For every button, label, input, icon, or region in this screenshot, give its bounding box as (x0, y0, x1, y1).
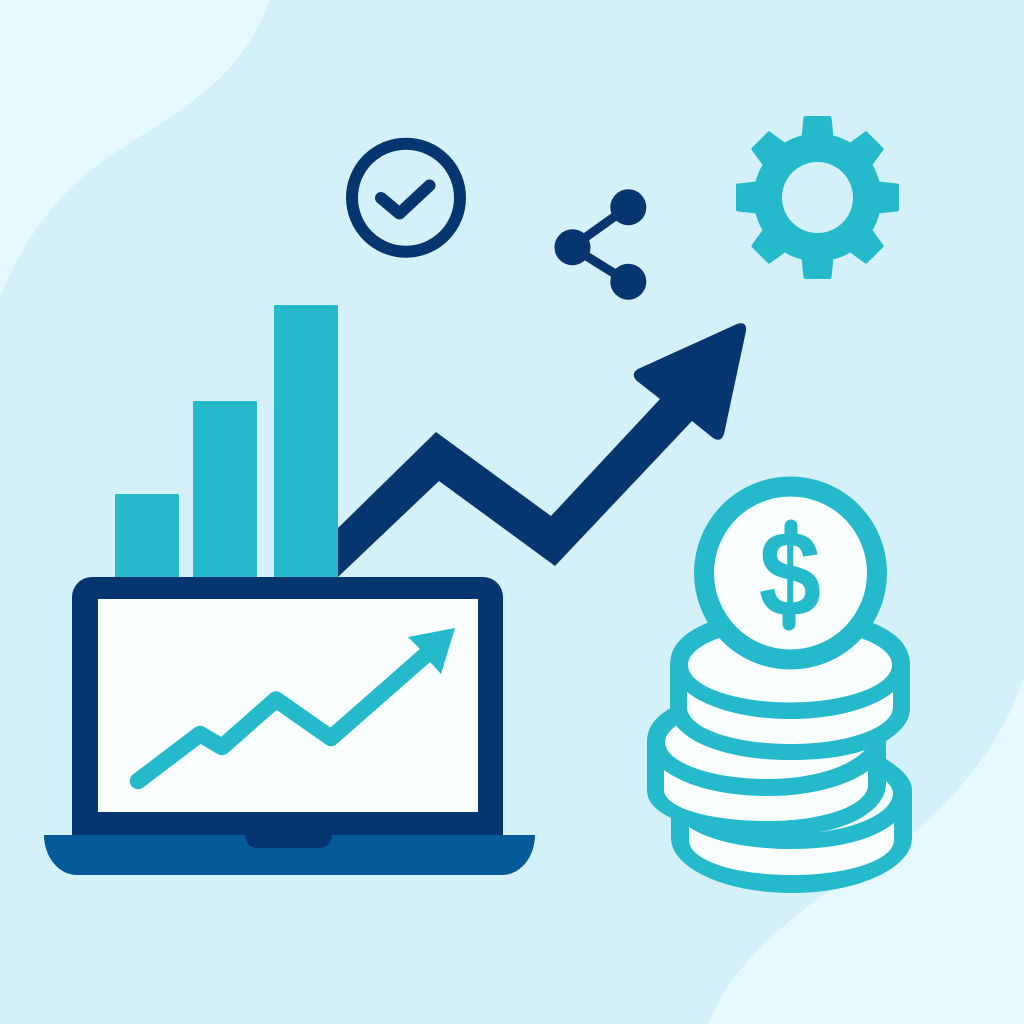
big growth arrow (338, 323, 746, 577)
laptop screen (98, 599, 478, 812)
laptop base (44, 835, 535, 875)
bar chart (115, 305, 338, 578)
background wave: bottom right (708, 677, 1024, 1024)
dollar coin (704, 486, 877, 660)
dollar coin: $ (759, 506, 821, 642)
coin stack (647, 486, 912, 893)
screen trend arrow (138, 628, 455, 781)
laptop (44, 577, 535, 875)
middle coin (647, 708, 886, 836)
background wave: top left (0, 0, 270, 297)
laptop notch (245, 835, 332, 848)
icon: check mark circle (352, 144, 460, 252)
icon: gear (738, 118, 897, 277)
laptop lid (72, 577, 503, 836)
top coin (670, 623, 910, 760)
icon: share nodes (554, 189, 646, 300)
bottom coin (671, 759, 912, 893)
